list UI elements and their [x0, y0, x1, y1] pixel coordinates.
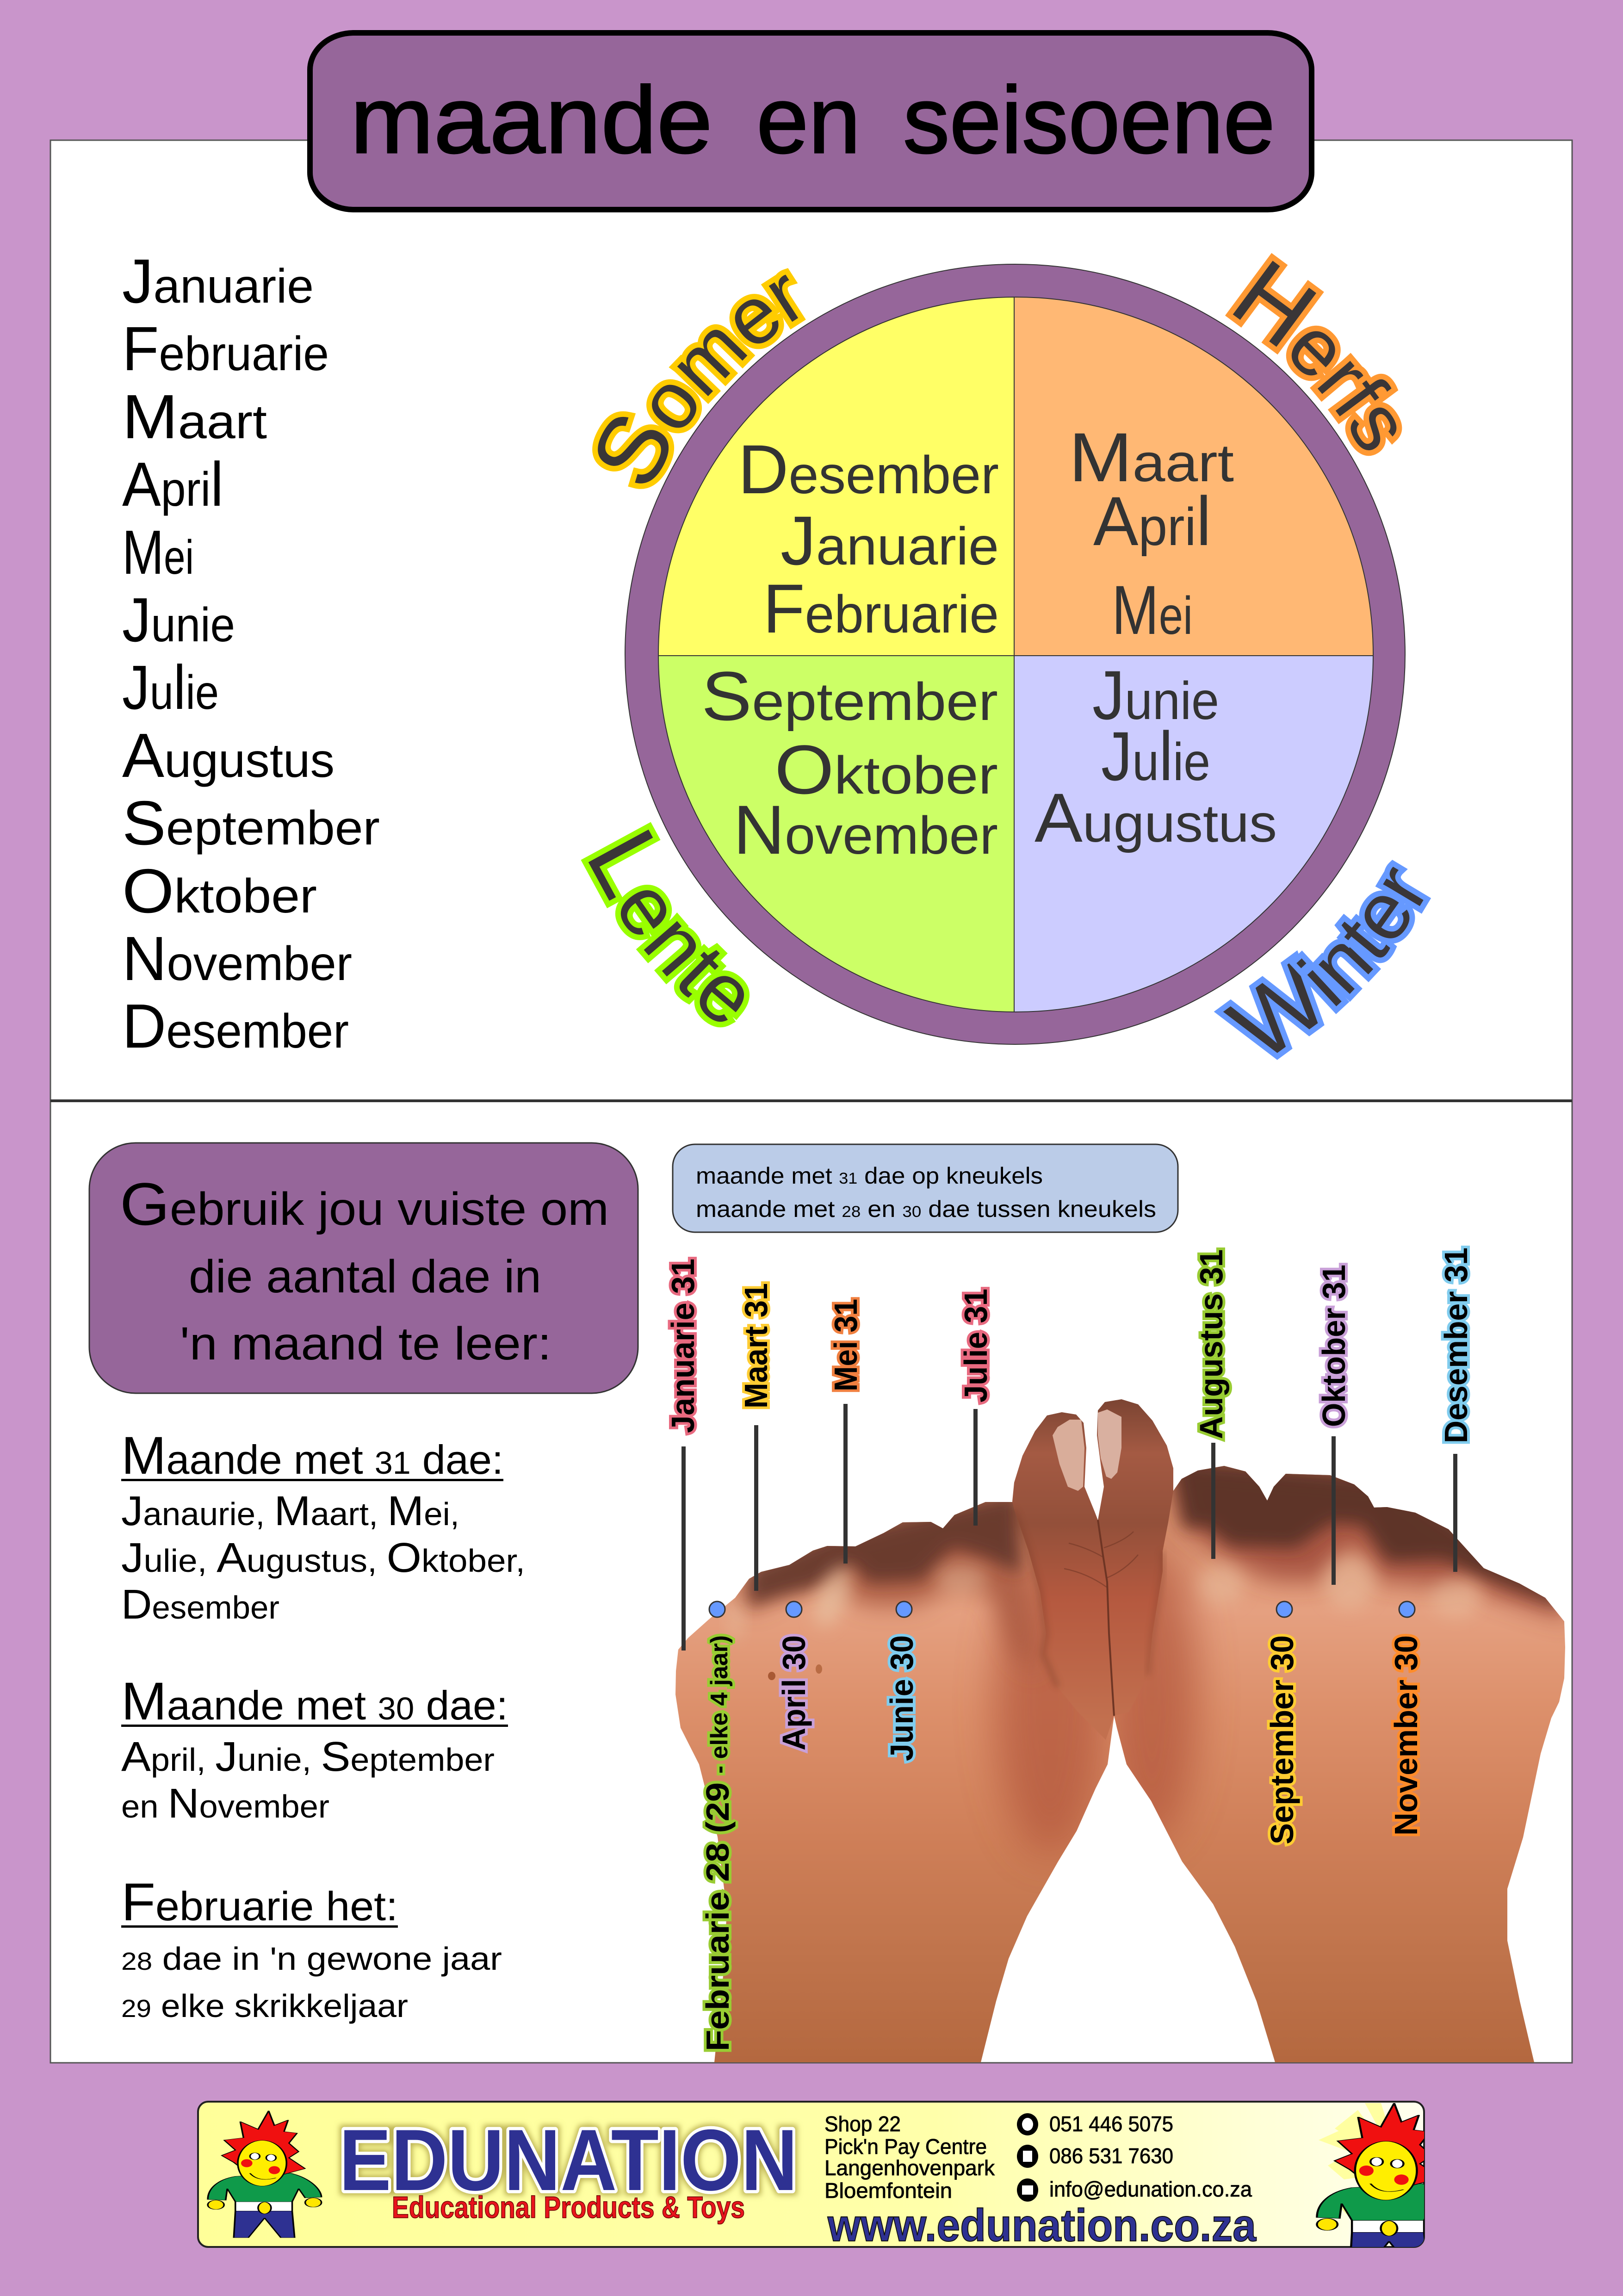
text block: months with 30 days — [121, 1672, 508, 1827]
text block: months with 31 days: Julie, Augustus, Oktober, — [121, 1535, 525, 1581]
month labels on knuckles: Julie 31 — [958, 1289, 994, 1402]
legend callout: maande met 31 dae op kneukels — [696, 1163, 1043, 1189]
title text: seisoene — [903, 67, 1275, 173]
winter months — [1035, 656, 1277, 856]
right thumbnail — [1098, 1409, 1121, 1479]
quadrant: lente — [658, 656, 1014, 1012]
spring months: September — [701, 657, 998, 735]
quadrant: herfs — [1014, 297, 1373, 656]
autumn months — [1069, 418, 1234, 649]
tagline: Educational Products & Toys — [392, 2190, 745, 2224]
season label: Somer: Somer — [570, 249, 820, 504]
address: Pick'n Pay Centre — [824, 2135, 987, 2159]
list of months — [122, 246, 380, 1061]
list of months: Desember — [122, 991, 349, 1061]
spring months: Oktober — [774, 731, 998, 808]
text block: months with 31 days — [121, 1426, 525, 1628]
month labels between knuckles — [700, 1635, 1424, 2051]
season label: Winter: Winter — [1211, 850, 1446, 1081]
list of months: Maart — [122, 382, 267, 452]
contact details: 051 446 5075 — [1049, 2112, 1173, 2136]
list of months: Augustus — [122, 720, 335, 790]
text block: February — [121, 1873, 502, 2024]
right thumb — [1097, 1399, 1173, 1716]
sponsor banner — [197, 2101, 1425, 2248]
title banner — [310, 33, 1312, 210]
instruction text — [120, 1170, 609, 1370]
between-knuckle dots — [709, 1601, 1415, 1617]
list of months: April — [122, 449, 223, 519]
seasons wheel — [625, 264, 1405, 1044]
list of months: Julie — [122, 652, 219, 722]
list of months: Oktober — [122, 856, 317, 926]
text block: months with 31 days: Maande met 31 dae: — [121, 1426, 503, 1485]
month labels on knuckles: Desember 31 — [1438, 1247, 1474, 1443]
thumb creases — [1014, 1509, 1163, 1716]
title text — [350, 67, 1275, 173]
month labels on knuckles — [665, 1247, 1474, 1443]
summer months: Desember — [738, 430, 999, 508]
address: Langenhovenpark — [824, 2156, 995, 2180]
summer months: Januarie — [781, 502, 999, 579]
instruction box — [89, 1143, 638, 1393]
quadrant: winter — [1014, 656, 1373, 1012]
left thumb — [1012, 1412, 1114, 1740]
list of months: Januarie — [122, 246, 314, 316]
summer months: Februarie — [763, 570, 999, 647]
month labels between knuckles: Junie 30 — [884, 1635, 920, 1761]
month labels between knuckles: November 30 — [1388, 1635, 1424, 1836]
month labels on knuckles: Maart 31 — [738, 1283, 774, 1409]
legend callout — [673, 1144, 1178, 1232]
list of months: Mei — [122, 517, 194, 587]
mascot right — [1316, 2103, 1424, 2247]
month labels on knuckles: Oktober 31 — [1316, 1265, 1352, 1427]
winter months: Augustus — [1035, 779, 1277, 856]
sun rays — [1319, 2103, 1385, 2216]
mascot left — [208, 2111, 322, 2238]
address: Shop 22 — [824, 2112, 901, 2136]
month labels on knuckles: Mei 31 — [828, 1299, 864, 1391]
month labels on knuckles: Augustus 31 — [1193, 1249, 1229, 1439]
quadrant: somer — [658, 297, 1014, 656]
month labels between knuckles: April 30 — [776, 1635, 812, 1750]
website: www.edunation.co.za — [827, 2200, 1257, 2251]
autumn months: Maart — [1069, 418, 1234, 496]
instruction text: 'n maand te leer: — [180, 1318, 551, 1370]
left thumbnail — [1053, 1420, 1084, 1491]
text block: months with 30 days: en November — [121, 1781, 329, 1827]
address: Bloemfontein — [824, 2178, 952, 2203]
list of months: September — [122, 788, 380, 858]
autumn months: April — [1093, 482, 1211, 560]
spring months — [701, 657, 998, 869]
contact details: 086 531 7630 — [1049, 2144, 1173, 2168]
summer months — [738, 430, 999, 647]
icon: fax — [1017, 2145, 1038, 2168]
month labels on knuckles: Januarie 31 — [665, 1259, 701, 1433]
brand glow: EDUNATION — [339, 2111, 798, 2209]
season label: Lente: Lente — [566, 812, 775, 1046]
text block: February: Februarie het: — [121, 1873, 398, 1932]
title text: maande — [350, 67, 712, 173]
list of months: November — [122, 924, 352, 993]
icon: telephone — [1017, 2113, 1038, 2135]
month labels between knuckles: September 30 — [1264, 1635, 1300, 1844]
white content panel — [50, 140, 1572, 2063]
image: two fists — [666, 1399, 1573, 2064]
instruction text: Gebruik jou vuiste om — [120, 1170, 609, 1238]
knuckle pointer lines — [681, 1404, 1457, 1651]
text block: months with 31 days: Janaurie, Maart, Mei, — [121, 1488, 459, 1534]
month labels between knuckles: - elke 4 jaar) — [706, 1635, 733, 1774]
right fist — [1106, 1458, 1573, 2064]
winter months: Julie — [1101, 717, 1210, 795]
left fist — [666, 1492, 1120, 2064]
title text: en — [756, 67, 861, 173]
text block: February: 28 dae in 'n gewone jaar — [121, 1941, 502, 1977]
season label: Herfs: Herfs — [1214, 239, 1428, 466]
list of months: Februarie — [122, 314, 329, 384]
month labels between knuckles: Februarie 28 (29 — [700, 1782, 736, 2051]
spring months: November — [733, 791, 998, 869]
text block: months with 30 days: Maande met 30 dae: — [121, 1672, 508, 1731]
legend callout: maande met 28 en 30 dae tussen kneukels — [696, 1196, 1156, 1222]
contact details: info@edunation.co.za — [1049, 2177, 1252, 2201]
winter months: Junie — [1092, 656, 1219, 734]
list of months: Junie — [122, 585, 235, 655]
text block: February: 29 elke skrikkeljaar — [121, 1988, 408, 2024]
text block: months with 30 days: April, Junie, September — [121, 1734, 495, 1780]
text block: months with 31 days: Desember — [121, 1582, 279, 1628]
brand name: EDUNATION — [339, 2111, 798, 2209]
autumn months: Mei — [1112, 571, 1193, 649]
instruction text: die aantal dae in — [189, 1251, 541, 1303]
icon: email — [1017, 2178, 1038, 2202]
address — [824, 2112, 995, 2203]
contact details — [1049, 2112, 1252, 2201]
